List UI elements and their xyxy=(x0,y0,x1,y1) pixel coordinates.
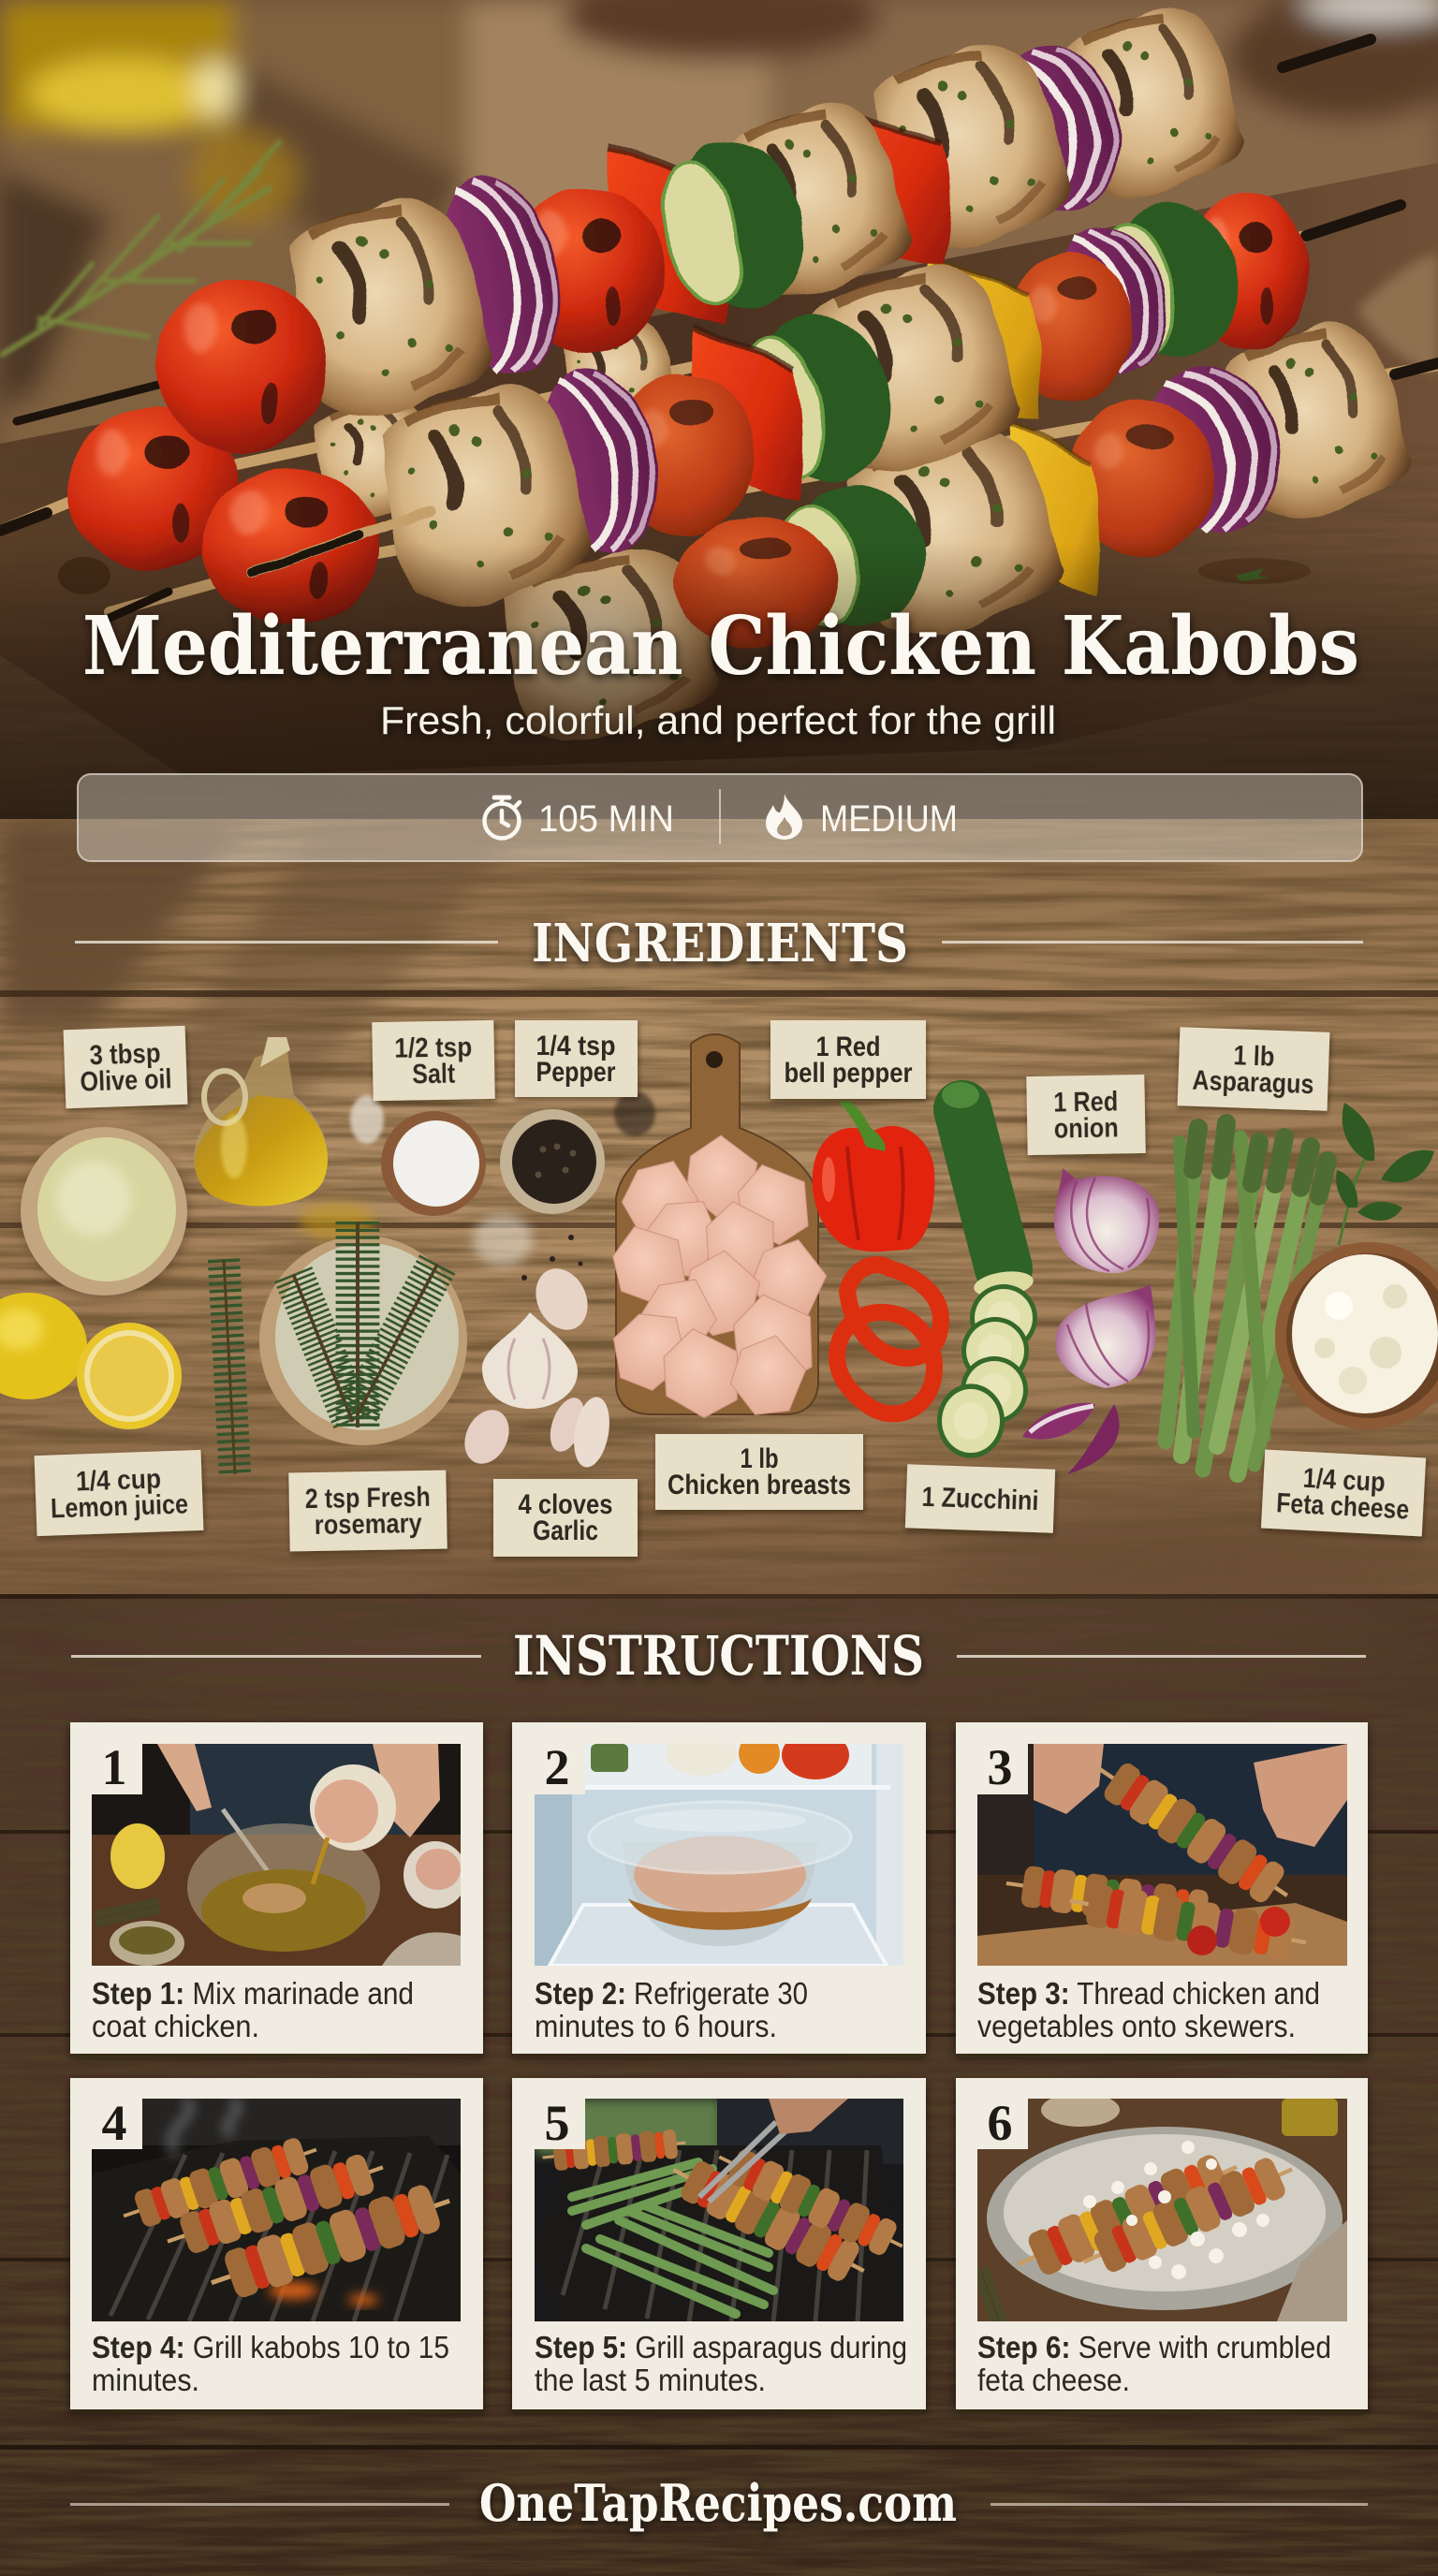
label: feta cheese xyxy=(1261,1450,1426,1536)
step text: Step 4: Grill kabobs 10 to 15 xyxy=(92,2330,449,2364)
label: red onion: onion xyxy=(1053,1112,1119,1145)
step 3 card xyxy=(956,1722,1368,2054)
label: asparagus: 1 lb xyxy=(1233,1040,1275,1073)
step text: Step 6: Serve with crumbled xyxy=(977,2330,1331,2364)
asparagus xyxy=(1166,1123,1328,1474)
lemon juice bowl xyxy=(21,1127,189,1299)
hero photo: grilled kabobs xyxy=(0,0,1438,819)
label: chicken breasts xyxy=(655,1434,863,1510)
red onion xyxy=(1022,1168,1159,1474)
step 5 card xyxy=(512,2078,926,2409)
label: chicken breasts: Chicken breasts xyxy=(668,1470,851,1500)
step 6 photo xyxy=(977,2099,1347,2321)
step 2 card xyxy=(512,1722,926,2054)
heading: instructions xyxy=(71,1624,1366,1688)
step 5 photo xyxy=(535,2099,903,2321)
step 1 card xyxy=(70,1722,483,2054)
label: pepper xyxy=(515,1020,638,1097)
cutting board with chicken xyxy=(597,1034,833,1424)
label: rosemary xyxy=(288,1471,448,1551)
label: lemon juice: 1/4 cup xyxy=(75,1463,162,1498)
label: pepper: Pepper xyxy=(536,1057,616,1088)
rosemary sprig xyxy=(224,1259,235,1474)
icon: stopwatch xyxy=(485,798,520,839)
skewer top xyxy=(155,0,1253,452)
label: zucchini: 1 Zucchini xyxy=(921,1482,1039,1516)
footer xyxy=(70,2473,1368,2533)
step 3 photo xyxy=(977,1744,1347,1966)
lemons xyxy=(0,1293,182,1429)
step 4 card xyxy=(70,2078,483,2409)
time text: 105 MIN xyxy=(538,798,674,840)
label: salt: 1/2 tsp xyxy=(394,1032,473,1064)
background: light wood xyxy=(0,805,1438,1610)
label: garlic: Garlic xyxy=(533,1515,598,1546)
label: red bell pepper xyxy=(770,1020,926,1099)
difficulty text: MEDIUM xyxy=(820,798,958,840)
step number: 5 xyxy=(545,2095,569,2151)
label: lemon juice xyxy=(35,1450,203,1536)
footer: OneTapRecipes.com xyxy=(479,2473,957,2533)
step 2 photo xyxy=(535,1744,903,1966)
step text: coat chicken. xyxy=(92,2009,259,2043)
label: garlic xyxy=(493,1479,638,1557)
step number: 3 xyxy=(987,1739,1013,1795)
step number: 6 xyxy=(987,2095,1013,2151)
drips and herbs on board xyxy=(58,557,1311,594)
step number: 1 xyxy=(101,1739,127,1795)
skewers with chicken and vegetables xyxy=(68,0,1419,753)
label: red onion xyxy=(1026,1075,1146,1155)
label: pepper: 1/4 tsp xyxy=(536,1031,616,1061)
scattered salt and pepper xyxy=(473,1214,582,1281)
label: red bell pepper: bell pepper xyxy=(785,1058,913,1089)
label: garlic: 4 cloves xyxy=(519,1489,612,1520)
red bell pepper xyxy=(813,1100,934,1251)
skewer sticks xyxy=(0,39,1438,618)
step 6 card xyxy=(956,2078,1368,2409)
feta bowl xyxy=(1275,1242,1438,1429)
heading: ingredients: INGREDIENTS xyxy=(532,913,908,974)
ingredient art xyxy=(0,1034,1438,1474)
pepper bowl xyxy=(500,1091,655,1214)
step text xyxy=(977,2330,1331,2397)
label: red onion: 1 Red xyxy=(1053,1086,1119,1119)
skewer front xyxy=(202,373,599,624)
label: rosemary: rosemary xyxy=(314,1508,422,1541)
rosemary plate xyxy=(259,1222,467,1445)
subtitle: Fresh, colorful, and perfect for the grill xyxy=(380,698,1056,742)
label: red bell pepper: 1 Red xyxy=(816,1032,880,1062)
olive oil bottle xyxy=(194,1037,374,1240)
background: dark wood xyxy=(0,1573,1438,2576)
garlic xyxy=(456,1260,614,1471)
icon: flame xyxy=(766,794,802,840)
step text: vegetables onto skewers. xyxy=(977,2009,1296,2043)
step 1 photo xyxy=(92,1744,461,1966)
step text xyxy=(535,2330,907,2397)
ingredient labels xyxy=(35,1020,1426,1557)
label: feta cheese: 1/4 cup xyxy=(1302,1463,1387,1498)
label: asparagus: Asparagus xyxy=(1192,1065,1314,1100)
label: olive oil: 3 tbsp xyxy=(89,1038,161,1071)
step text: minutes. xyxy=(92,2363,199,2397)
label: salt xyxy=(372,1020,495,1101)
label: olive oil xyxy=(64,1026,187,1108)
label: asparagus xyxy=(1178,1027,1329,1111)
step text: minutes to 6 hours. xyxy=(535,2009,777,2043)
step text xyxy=(535,1976,808,2043)
label: lemon juice: Lemon juice xyxy=(50,1488,189,1525)
step 4 photo xyxy=(92,2099,461,2321)
label: olive oil: Olive oil xyxy=(80,1063,172,1098)
info bar xyxy=(78,774,1362,861)
label: zucchini xyxy=(905,1464,1055,1533)
step text: Step 5: Grill asparagus during xyxy=(535,2330,907,2364)
heading: ingredients xyxy=(75,913,1363,974)
label: feta cheese: Feta cheese xyxy=(1275,1487,1410,1526)
step text: Step 3: Thread chicken and xyxy=(977,1976,1320,2011)
step text: Step 1: Mix marinade and xyxy=(92,1976,414,2011)
step text xyxy=(92,2330,449,2397)
skewer bottom xyxy=(307,310,1419,753)
skewer middle xyxy=(68,192,1310,571)
zucchini xyxy=(937,1082,1037,1458)
step number: 2 xyxy=(545,1739,569,1795)
pepper rings xyxy=(837,1265,941,1413)
label: rosemary: 2 tsp Fresh xyxy=(304,1482,431,1515)
label: salt: Salt xyxy=(412,1059,456,1090)
parsley xyxy=(1336,1103,1434,1245)
step text: feta cheese. xyxy=(977,2363,1130,2397)
salt bowl xyxy=(350,1095,486,1216)
label: chicken breasts: 1 lb xyxy=(740,1443,779,1474)
step text: the last 5 minutes. xyxy=(535,2363,766,2397)
step text xyxy=(977,1976,1320,2043)
step text: Step 2: Refrigerate 30 xyxy=(535,1976,808,2011)
heading: instructions: INSTRUCTIONS xyxy=(513,1624,924,1688)
step text xyxy=(92,1976,414,2043)
step number: 4 xyxy=(101,2095,127,2151)
